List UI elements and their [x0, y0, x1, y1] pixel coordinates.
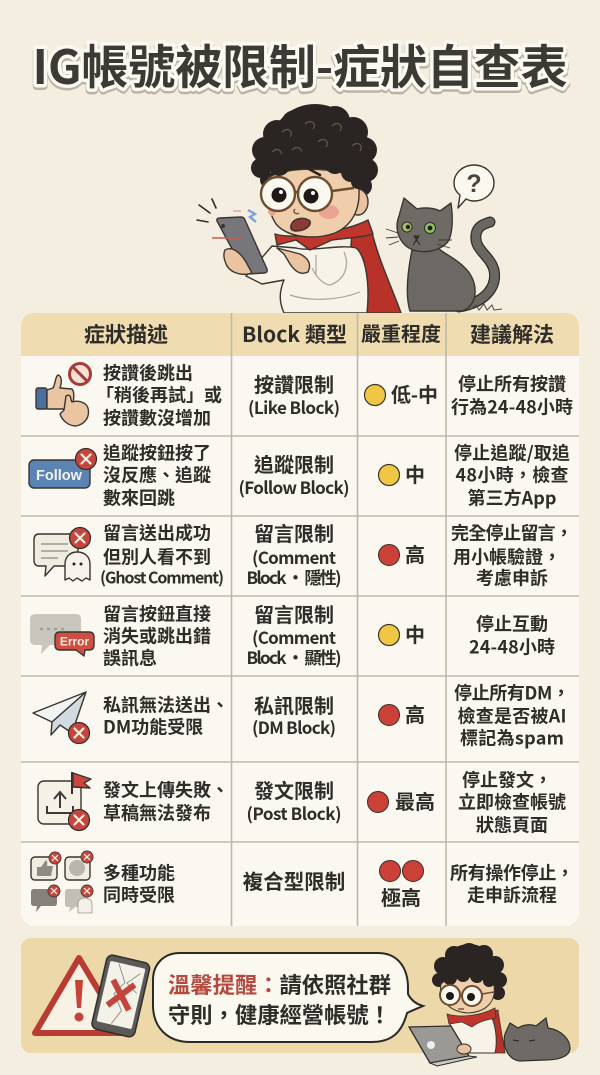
row 3: ghost comment: 完全停止留言， [451, 520, 573, 546]
fringe [268, 148, 365, 189]
row 5: DM block: 停止所有DM， [454, 680, 570, 706]
illustration: grey cat with question bubble [386, 165, 502, 311]
illustration: sleeping cat [504, 1018, 570, 1061]
icon: follow button: Follow [36, 468, 83, 484]
icon: follow button [29, 448, 96, 488]
row 2: follow block: 沒反應、追蹤 [103, 462, 211, 488]
row 6: post block [38, 766, 566, 838]
row 1: like block: 停止所有按讚 [458, 370, 566, 396]
icon: error bubble [30, 614, 94, 656]
row 5: DM block: 私訊限制 [254, 690, 334, 719]
row 2: follow block: 第三方App [468, 484, 556, 510]
row 7: compound block: 極高 [381, 882, 421, 911]
body [407, 248, 475, 311]
row 1: like block: 「稍後再試」或 [96, 382, 222, 408]
row 5: DM block: 私訊無法送出、 [103, 692, 229, 718]
eyebrows [273, 168, 320, 175]
illustration: worried boy with phone [197, 104, 401, 313]
row 3: ghost comment: 用小帳驗證， [453, 544, 561, 570]
hoodie body [246, 246, 368, 313]
row 1: like block: (Like Block) [248, 394, 340, 419]
ground grass [470, 304, 502, 310]
question bubble [454, 165, 494, 208]
row 4: visible comment block: 24-48小時 [469, 634, 555, 660]
row 3: ghost comment: (Comment [252, 544, 336, 569]
icon: warning triangle [35, 958, 124, 1033]
hair curls [272, 121, 361, 157]
row 7: compound block: 走申訴流程 [467, 882, 557, 908]
row 2: follow block [29, 440, 570, 510]
row 7: compound block: 同時受限 [103, 882, 175, 908]
row 2: follow block: 48小時，檢查 [456, 462, 568, 488]
mini hoodie [445, 1018, 496, 1053]
glasses [261, 177, 354, 211]
laptop [409, 1026, 469, 1063]
row 2: follow block: 追蹤限制 [254, 449, 334, 478]
phone [217, 217, 267, 274]
row 6: post block: 狀態頁面 [476, 812, 548, 838]
header row: 嚴重程度 [361, 318, 441, 347]
pupils [272, 188, 286, 202]
row 1: like block: 按讚限制 [254, 369, 334, 398]
row 3: ghost comment: 高 [405, 539, 425, 568]
row 4: visible comment block: 留言按鈕直接 [103, 600, 211, 626]
row 2: follow block: 停止追蹤/取追 [454, 440, 570, 466]
mini glasses [440, 985, 460, 1005]
row 3: ghost comment: (Ghost Comment) [100, 564, 224, 588]
row 4: visible comment block: Block · 顯性) [246, 644, 342, 669]
row 4: visible comment block: 誤訊息 [103, 644, 157, 670]
row 5: DM block: 高 [405, 699, 425, 728]
motion lines [197, 199, 216, 222]
eyes [402, 222, 412, 232]
hoodie details [290, 252, 360, 299]
row 2: follow block: 數來回跳 [103, 484, 175, 510]
row 6: post block: 最高 [395, 786, 435, 815]
cape [350, 228, 401, 313]
mini face [441, 977, 494, 1013]
row 5: DM block: 標記為spam [460, 724, 564, 750]
row 7: compound block: 多種功能 [103, 860, 175, 886]
icon: paper plane [33, 692, 90, 744]
icon: error bubble: Error [60, 634, 90, 648]
ear [348, 189, 368, 215]
header row: Block 類型 [242, 319, 347, 349]
row 4: visible comment block: (Comment [252, 624, 336, 649]
mini scarf [447, 1008, 496, 1027]
row 6: post block: 草稿無法發布 [103, 800, 211, 826]
row 5: DM block: (DM Block) [252, 714, 336, 739]
row 1: like block: 行為24-48小時 [451, 394, 573, 420]
face [267, 169, 359, 237]
row 5: DM block: DM功能受限 [103, 714, 203, 740]
title: IG帳號被限制-症狀自查表 [32, 29, 568, 98]
row 6: post block: 立即檢查帳號 [458, 788, 566, 814]
scarf [275, 220, 373, 250]
hands [224, 249, 252, 274]
head [397, 198, 452, 252]
header row [21, 313, 579, 356]
row 1: like block: 按讚數沒增加 [103, 404, 211, 430]
row 3: ghost comment: 留言限制 [254, 518, 334, 547]
cheek [319, 205, 339, 219]
header row: 建議解法 [470, 319, 554, 349]
row 1: like block: 低-中 [391, 379, 438, 408]
row 4: visible comment block: 停止互動 [476, 610, 548, 636]
row 3: ghost comment: 但別人看不到 [103, 544, 211, 570]
row 6: post block: 發文限制 [254, 775, 334, 804]
row 4: visible comment block: 消失或跳出錯 [103, 622, 211, 648]
row 3: ghost comment [34, 518, 573, 590]
speech bubble: 溫馨提醒：請依照社群 [168, 968, 391, 1000]
row 6: post block: 停止發文， [462, 766, 552, 792]
illustration: grey cat with question bubble: ? [466, 170, 482, 198]
illustration: boy on laptop [409, 943, 507, 1066]
row 2: follow block: 中 [405, 459, 425, 488]
icon: four blocked features [31, 851, 93, 913]
header row: 症狀描述 [84, 319, 168, 349]
nose and mouth [294, 209, 299, 214]
row 1: like block: 按讚後跳出 [103, 360, 193, 386]
row 7: compound block: 所有操作停止， [450, 860, 574, 886]
nose and whiskers [413, 236, 420, 245]
row 5: DM block [33, 680, 570, 750]
row 3: ghost comment: 留言送出成功 [103, 520, 211, 546]
row 1: like block [36, 360, 573, 430]
row 2: follow block: (Follow Block) [238, 474, 350, 499]
mini cape [488, 1010, 505, 1053]
speech bubble [153, 953, 423, 1042]
row 7: compound block [31, 851, 574, 913]
icon: thumb blocked [36, 364, 90, 426]
table panel [21, 313, 579, 926]
title: IG帳號被限制-症狀自查表 [32, 31, 568, 100]
reminder banner [21, 938, 579, 1066]
icon: upload with flag [38, 772, 91, 830]
icon: comment with ghost [34, 528, 90, 581]
row 2: follow block: 追蹤按鈕按了 [103, 440, 211, 466]
row 4: visible comment block: 留言限制 [254, 599, 334, 628]
row 4: visible comment block [30, 599, 555, 670]
row 3: ghost comment: 考慮申訴 [476, 564, 548, 590]
mini hair [432, 943, 507, 1000]
mini fringe [443, 968, 495, 987]
speech bubble: 守則，健康經營帳號！ [168, 998, 391, 1030]
row 4: visible comment block: 中 [405, 619, 425, 648]
row 6: post block: (Post Block) [246, 800, 342, 825]
row 6: post block: 發文上傳失敗、 [103, 776, 229, 802]
icon: cracked phone [91, 954, 151, 1038]
hair [251, 104, 378, 196]
row 3: ghost comment: Block · 隱性) [246, 564, 342, 589]
row 5: DM block: 檢查是否被AI [458, 702, 566, 728]
tail [459, 222, 495, 307]
row 7: compound block: 複合型限制 [243, 865, 345, 895]
